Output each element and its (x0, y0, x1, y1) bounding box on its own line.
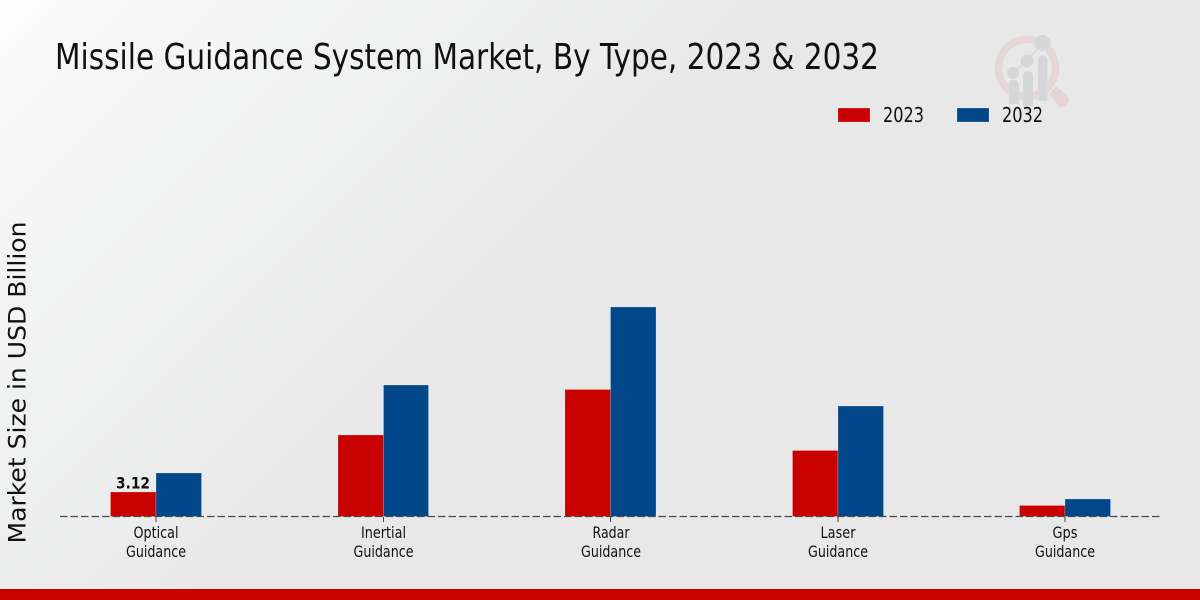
icon: watermark logo (998, 35, 1069, 107)
footer band (0, 589, 1200, 600)
category label: Laser Guidance (808, 523, 868, 561)
category label: Gps Guidance: Gps (1052, 523, 1078, 542)
category label: Radar Guidance: Guidance (581, 542, 641, 561)
bars: Inertial Guidance (338, 385, 428, 516)
category label: Inertial Guidance: Guidance (354, 542, 414, 561)
title: Missile Guidance System Market, By Type, 2023 & 2032 (55, 37, 879, 78)
category label: Inertial Guidance: Inertial (361, 523, 406, 542)
legend item: 2023: 2023 (883, 103, 924, 127)
legend (838, 103, 1043, 127)
legend item: 2032 (957, 103, 1043, 127)
category label: Inertial Guidance (354, 523, 414, 561)
bars: Optical Guidance (110, 473, 202, 516)
category label: Laser Guidance: Laser (820, 523, 856, 542)
bars: Radar Guidance (565, 307, 656, 516)
category label: Laser Guidance: Guidance (808, 542, 868, 561)
y-axis title: Market Size in USD Billion (4, 222, 32, 544)
baseline axis (60, 516, 1160, 518)
category label: Radar Guidance: Radar (592, 523, 630, 542)
bars: Gps Guidance (1020, 499, 1110, 516)
legend item: 2023 (838, 103, 924, 127)
category label: Optical Guidance: Guidance (126, 542, 186, 561)
data label: 3.12: 3.12 (116, 474, 150, 492)
legend item: 2032: 2032 (1002, 103, 1043, 127)
bar chart (60, 307, 1160, 522)
category label: Radar Guidance (581, 523, 641, 561)
category label: Gps Guidance (1035, 523, 1095, 561)
bars: Laser Guidance (792, 406, 884, 516)
category label: Gps Guidance: Guidance (1035, 542, 1095, 561)
category label: Optical Guidance (126, 523, 186, 561)
category label: Optical Guidance: Optical (134, 523, 178, 542)
